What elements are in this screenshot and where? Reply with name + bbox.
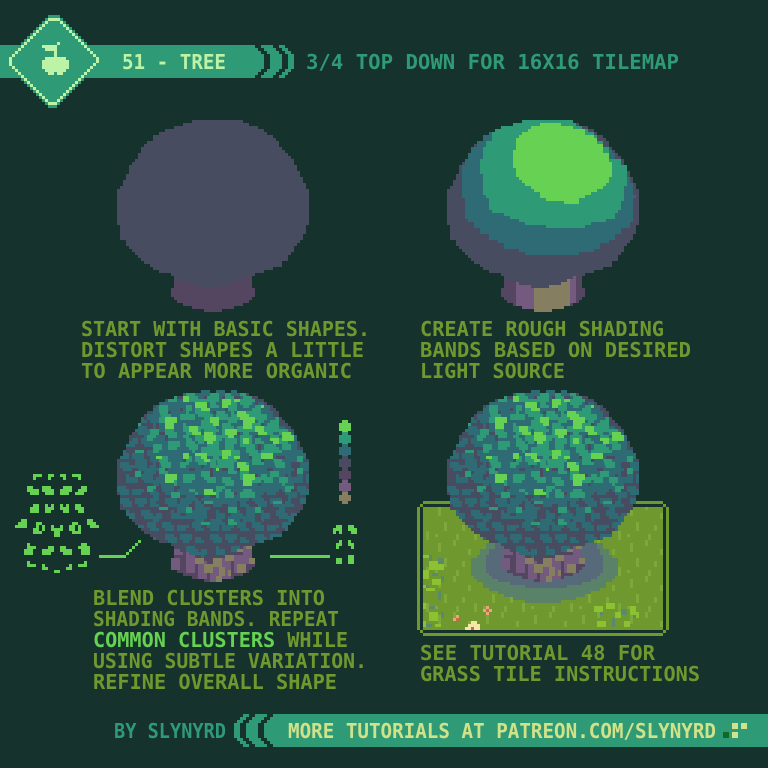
text: step 1 caption: START WITH BASIC SHAPES. (81, 317, 370, 341)
text: step 4 caption: SEE TUTORIAL 48 FOR (420, 641, 656, 665)
text: step 1 caption: TO APPEAR MORE ORGANIC (81, 359, 352, 383)
panel: step 2 shading bands tree (447, 120, 639, 312)
banner chevrons (261, 45, 294, 78)
text: step 4 caption: GRASS TILE INSTRUCTIONS (420, 662, 700, 686)
text: step 2 caption: BANDS BASED ON DESIRED (420, 338, 691, 362)
footer text: MORE TUTORIALS AT PATREON.COM/SLYNYRD (288, 719, 716, 743)
color palette column (339, 420, 351, 504)
panel: step 4 tree on grass tile (417, 390, 669, 636)
panel: step 1 basic shapes tree (117, 120, 309, 312)
arrow: left leader line (99, 540, 141, 558)
callout: trunk bark samples (333, 525, 357, 564)
banner title: 51 - TREE (122, 50, 226, 74)
grass tufts (423, 555, 639, 627)
callout: leaf cluster samples (15, 474, 99, 573)
text: step 2 caption (420, 317, 691, 383)
diamond badge (9, 15, 99, 108)
text: author credit: BY SLYNYRD (114, 719, 226, 743)
grass blades (423, 507, 663, 630)
icon: pixel dots (723, 723, 747, 738)
grass tile frame (417, 501, 669, 636)
tree ground shadow (471, 543, 618, 603)
text: step 2 caption: LIGHT SOURCE (420, 359, 565, 383)
icon: apple (42, 42, 69, 75)
text: step 3 caption: REFINE OVERALL SHAPE (93, 670, 337, 694)
text: step 3 caption (93, 586, 367, 694)
text: step 3 caption: SHADING BANDS. REPEAT (93, 607, 339, 631)
text: step 2 caption: CREATE ROUGH SHADING (420, 317, 664, 341)
text: step 4 caption (420, 641, 700, 686)
text: step 3 caption: USING SUBTLE VARIATION. (93, 649, 367, 673)
header banner (0, 15, 294, 108)
grass ground (423, 507, 663, 630)
footer banner (234, 714, 768, 747)
arrow: right leader line (270, 555, 330, 558)
text: step 1 caption (81, 317, 370, 383)
textured tree (447, 390, 639, 582)
text: step 3 caption: BLEND CLUSTERS INTO (93, 586, 325, 610)
flowers (453, 606, 492, 630)
banner bar (0, 45, 264, 78)
text: step 1 caption: DISTORT SHAPES A LITTLE (81, 338, 364, 362)
subtitle: 3/4 TOP DOWN FOR 16X16 TILEMAP (306, 50, 679, 74)
panel: step 3 textured tree (117, 390, 309, 582)
footer chevrons and bar (234, 714, 768, 747)
text: step 3 caption: COMMON CLUSTERS WHILE (93, 628, 348, 652)
